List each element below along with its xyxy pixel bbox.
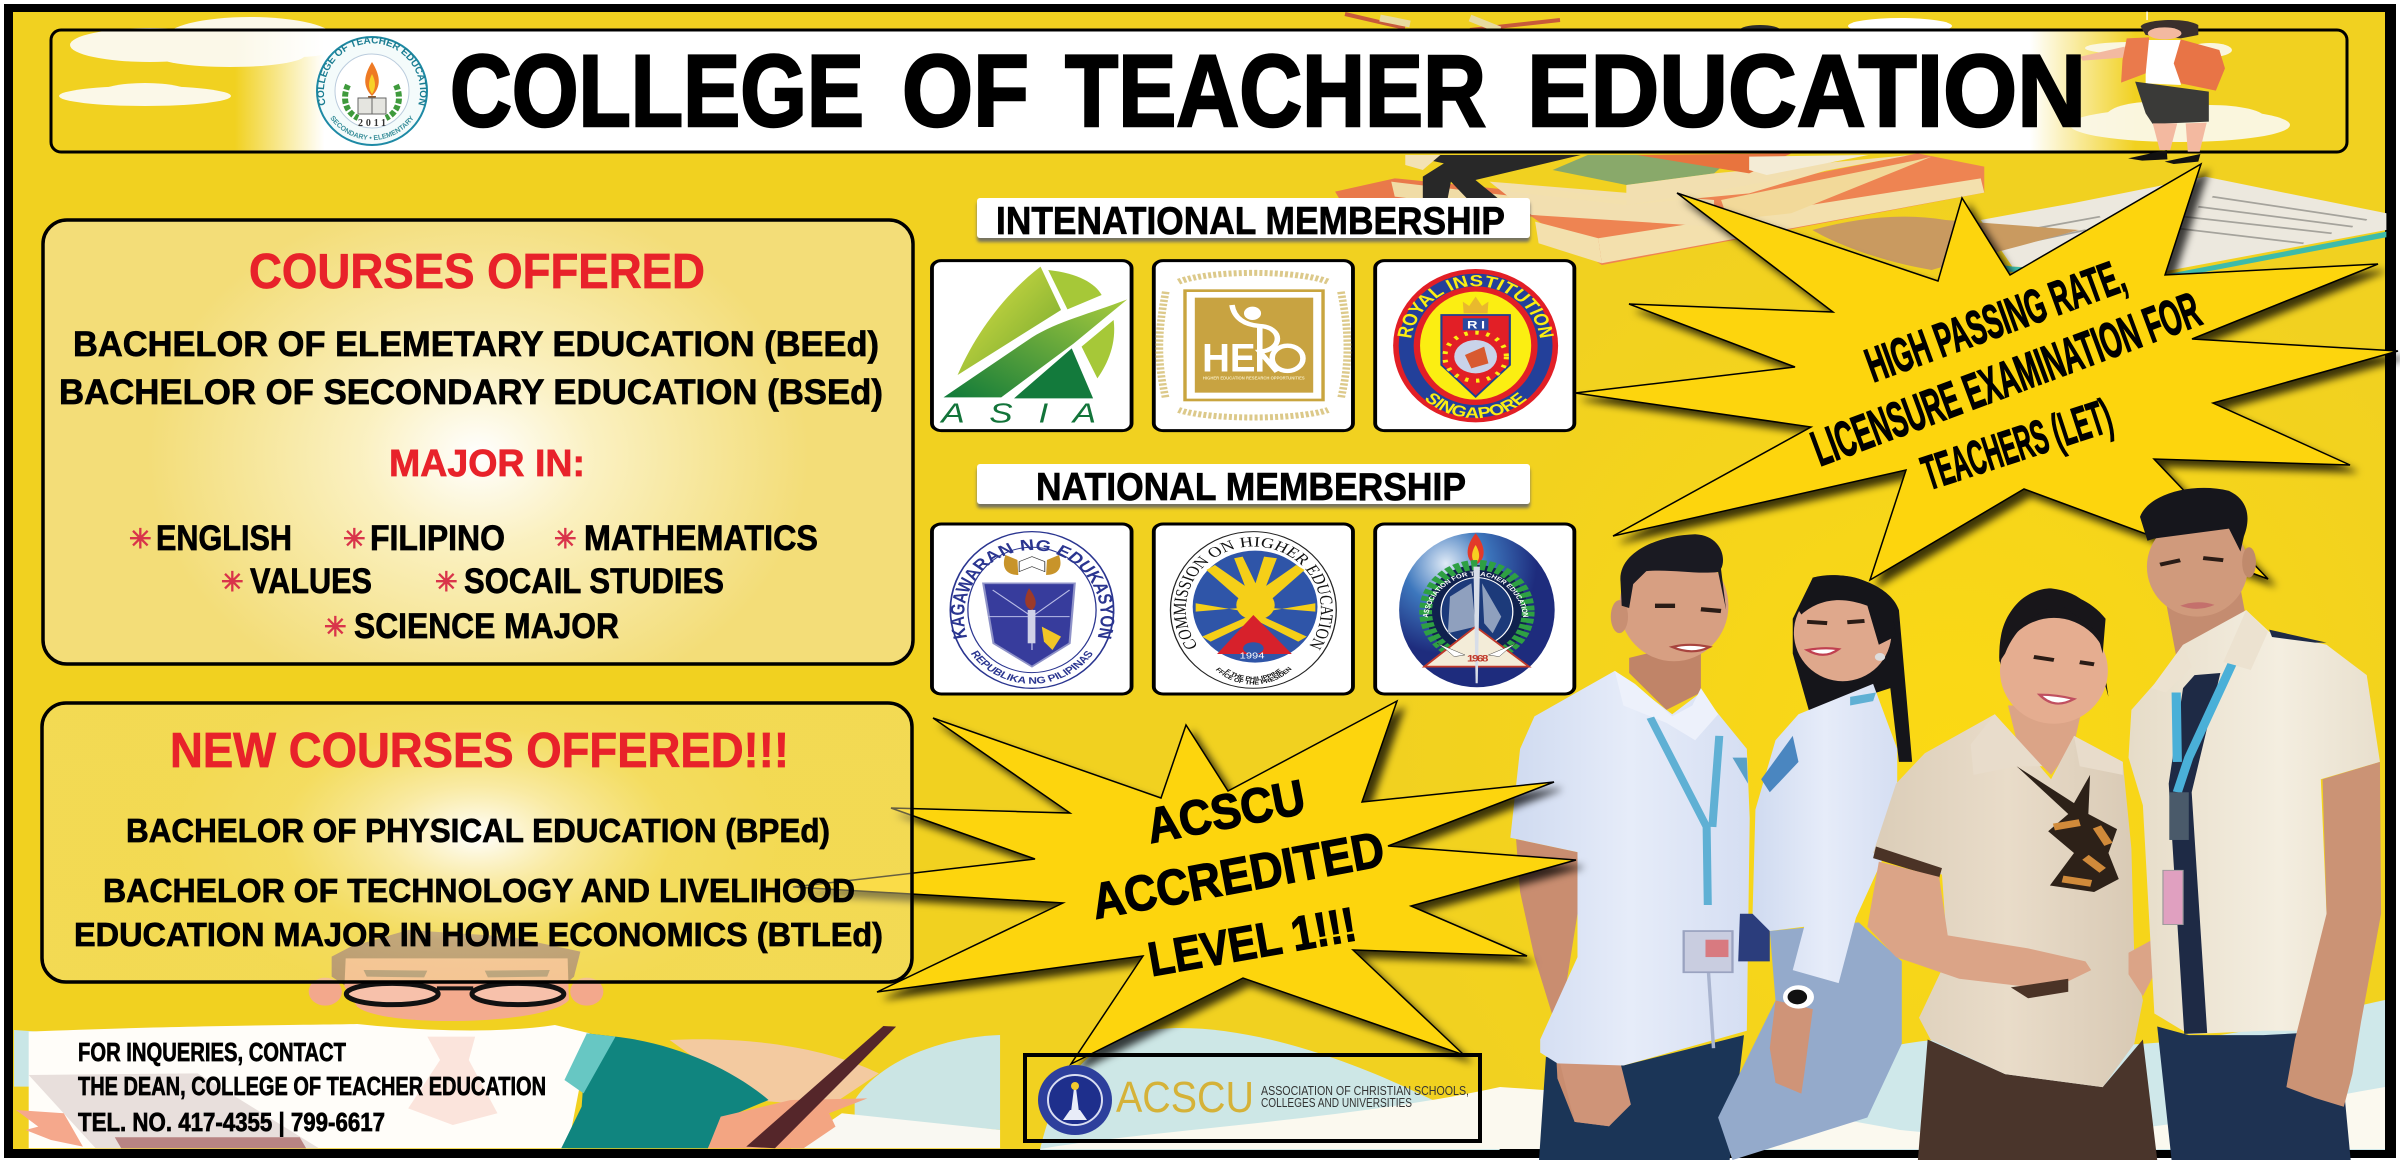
text: BTLEd: EDUCATION MAJOR IN HOME ECONOMICS (BTLEd) [74,916,883,953]
list of majors: FILIPINO [370,519,505,558]
title [450,34,2086,148]
logo: HERO [1154,261,1353,431]
starburst text lines: LEVEL 1!!! [1144,898,1360,987]
contact text: FOR INQUERIES, CONTACT [78,1037,346,1067]
student: man in blue shirt [1510,534,1750,1160]
logo: Department of Education: REPUBLIKA NG PILIPINAS [970,650,1092,684]
list of majors: ENGLISH [156,519,292,558]
list of majors: ✳ [324,612,347,643]
logo: ASIA [932,261,1132,431]
list of majors: VALUES [250,562,372,601]
illustration: teacher with pointer [14,930,1000,1148]
text: BPEd: BACHELOR OF PHYSICAL EDUCATION (BPEd) [126,812,830,849]
starburst text lines: TEACHERS (LET) [1916,390,2119,501]
text: ACSCU wordmark: ACSCU [1116,1073,1254,1122]
cloud behind teacher figure [2070,42,2290,142]
logo: Royal Institution Singapore: R I [1467,318,1485,331]
logo: Department of Education [930,522,1134,696]
heading: courses offered: COURSES OFFERED [249,245,705,299]
logo: Commission on Higher Education: 1994 [1240,651,1265,661]
logo: Royal Institution Singapore [1373,259,1576,432]
students photo [1510,488,2381,1160]
illustration: open book and leaf [1812,177,2386,280]
title: OF [902,34,1029,148]
logo: Royal Institution Singapore: ROYAL INSTITUTION [1397,275,1554,338]
panel: new courses offered [42,703,912,982]
contact text: TEL. NO. 417-4355 | 799-6617 [78,1107,385,1137]
list of majors: ✳ [554,524,577,555]
label: international membership: INTENATIONAL MEMBERSHIP [996,200,1505,243]
starburst text lines [1087,771,1389,987]
title: EDUCATION [1527,34,2086,148]
list of majors: MATHEMATICS [584,519,818,558]
contact text [78,1037,546,1137]
student: woman in beige uniform [1867,588,2163,1160]
student: woman in white blouse [1718,575,1912,1160]
heading: major in: MAJOR IN: [389,443,585,485]
list of majors [129,519,818,646]
title: TEACHER [1065,34,1486,148]
college seal logo [316,36,428,146]
text: BEEd: BACHELOR OF ELEMETARY EDUCATION (BEEd) [73,325,879,364]
illustration: books stack and legs [1335,153,1984,265]
starburst text lines: ACCREDITED [1087,821,1389,930]
starburst text lines: ACSCU [1142,771,1310,854]
list of majors: ✳ [129,524,152,555]
starburst: high passing rate [1575,164,2398,580]
logo: Royal Institution Singapore: SINGAPORE [1426,392,1527,418]
list of majors: SOCAIL STUDIES [464,562,724,601]
text: association name: ASSOCIATION OF CHRISTIAN SCHOOLS, [1261,1083,1469,1098]
logo: HERO: HIGHER EDUCATION RESEARCH OPPORTUNITIES [1203,376,1305,381]
text: BTLEd [74,872,883,953]
list of majors: ✳ [435,567,458,598]
logo: Association for Teacher Education [1373,522,1576,696]
logo: Commission on Higher Education: OFFICE OF THE PRESIDENT [1216,666,1292,685]
student: man in cream uniform [2129,488,2381,1160]
ACSCU logo box [1025,1055,1480,1141]
bottom hills [1040,1000,2385,1150]
text: association name [1261,1083,1469,1110]
starburst text lines [1804,250,2208,501]
list of majors: SCIENCE MAJOR [354,607,619,646]
logo: ASIA: A S I A [939,398,1096,429]
icon: ACSCU seal [1038,1065,1112,1135]
panel: courses offered [43,220,913,664]
label: national membership: NATIONAL MEMBERSHIP [1036,466,1466,509]
header banner [51,30,2347,152]
contact text: THE DEAN, COLLEGE OF TEACHER EDUCATION [78,1071,546,1101]
text: BSEd: BACHELOR OF SECONDARY EDUCATION (BSEd) [59,373,883,412]
text: association name: COLLEGES AND UNIVERSITIES [1261,1095,1412,1110]
list of majors: ✳ [343,524,366,555]
logo: HERO: HE [1202,335,1256,380]
starburst: ACSCU accredited [793,701,1576,1064]
college seal logo: SECONDARY • ELEMENTARY [330,115,413,140]
starburst text lines: HIGH PASSING RATE, [1859,250,2133,393]
title: COLLEGE [450,34,864,148]
list of majors: ✳ [221,567,244,598]
heading: new courses offered: NEW COURSES OFFERED!!! [170,724,789,778]
logo cards [930,259,1576,696]
illustration: teacher standing [2080,12,2225,164]
logo: Department of Education: KAGAWARAN NG EDUKASYON [950,539,1114,639]
logo: Commission on Higher Education: OF THE PHILIPPINES [1225,668,1282,681]
logo: Association for Teacher Education: ASSOCIATION FOR TEACHER EDUCATION [1422,572,1528,618]
college seal logo: 2011 [358,118,386,129]
college seal logo: COLLEGE OF TEACHER EDUCATION [317,36,427,106]
text: BTLEd: BACHELOR OF TECHNOLOGY AND LIVELIHOOD [103,872,855,909]
logo: Commission on Higher Education [1152,522,1355,696]
logo: Association for Teacher Education: 1968 [1467,654,1488,664]
illustration: top ornaments [1345,14,1952,35]
illustration: clouds top left [59,17,338,106]
logo: Commission on Higher Education: COMMISSION ON HIGHER EDUCATION [1174,537,1333,650]
